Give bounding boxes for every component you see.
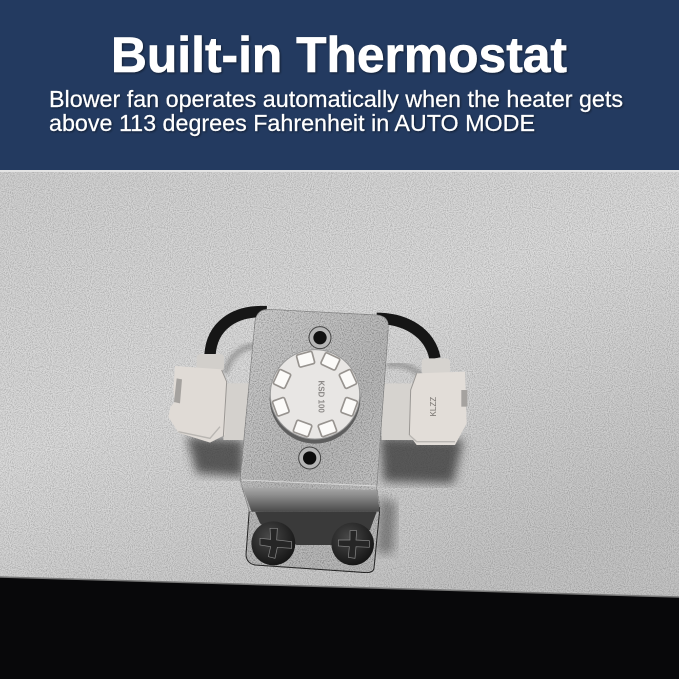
left connector [168, 354, 253, 443]
thermostat dial [270, 350, 360, 444]
right screw [331, 523, 374, 565]
description text [49, 86, 623, 136]
black wires [210, 312, 435, 358]
right connector [382, 358, 467, 445]
bottom rivet hole [299, 447, 321, 469]
mounting plate [240, 309, 388, 512]
thermostat dial: KSD 100 [316, 380, 325, 413]
description text: above 113 degrees Fahrenheit in AUTO MODE [49, 110, 535, 136]
panel: galvanized metal surface [0, 170, 679, 600]
bracket foot [246, 507, 380, 573]
dark bottom background [0, 560, 679, 679]
title: Built-in Thermostat [111, 27, 567, 83]
description text: Blower fan operates automatically when the heater gets [49, 86, 623, 112]
panel: title banner [0, 0, 679, 172]
top rivet hole [309, 327, 331, 349]
right connector: KLZZ [429, 397, 438, 416]
thermostat assembly photo illustration [168, 309, 467, 573]
cast shadows [187, 345, 463, 553]
left screw [251, 521, 295, 565]
